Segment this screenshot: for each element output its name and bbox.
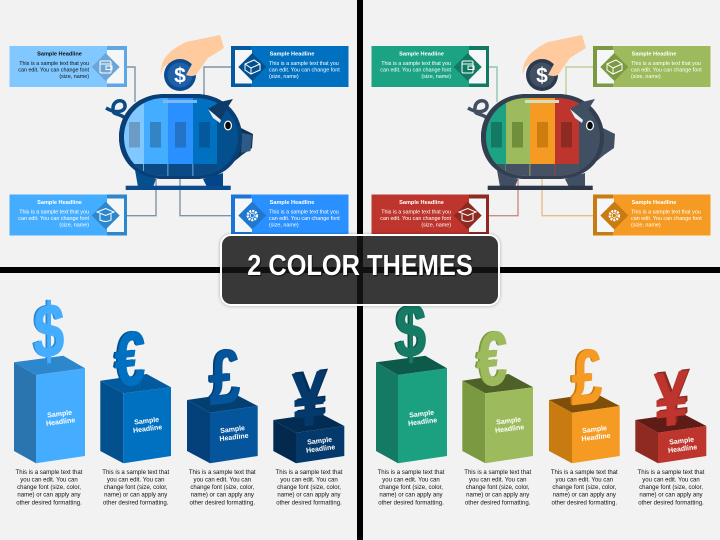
captions: you can edit. You can xyxy=(469,478,526,484)
box: pound column xyxy=(549,393,620,463)
icon: lime euro: € xyxy=(477,315,507,404)
card: bottom left: (size, name) xyxy=(59,222,89,228)
box: euro column: Headline xyxy=(133,424,163,435)
card: bottom left: can edit. You can change font xyxy=(380,216,451,222)
icon: blue euro: € xyxy=(115,315,145,404)
box: euro column: Headline xyxy=(495,424,525,435)
card: top right: This is a sample text that you xyxy=(631,61,701,67)
box: yen column: Headline xyxy=(668,444,698,455)
card: bottom left: This is a sample text that you xyxy=(19,209,89,215)
captions: change font (size, color, xyxy=(104,485,168,491)
card: bottom right: Sample Headline xyxy=(632,200,676,206)
captions: This is a sample text that xyxy=(102,470,169,476)
box: yen column xyxy=(635,413,706,463)
icon: piggy bank xyxy=(468,94,615,190)
captions: change font (size, color, xyxy=(639,485,703,491)
box: dollar column: Sample xyxy=(409,410,435,420)
box: euro column: Sample xyxy=(496,417,522,427)
panel: multicolor currency boxes xyxy=(376,356,706,506)
box: dollar column xyxy=(14,356,85,463)
card: top left xyxy=(10,46,127,87)
icon: orange pound: £ xyxy=(572,333,602,422)
box: pound column: Sample xyxy=(582,425,608,435)
card: top left: Sample Headline xyxy=(399,52,444,58)
card: top left: can edit. You can change font xyxy=(380,67,451,73)
icon: blue dollar: $ xyxy=(34,287,64,376)
captions: you can edit. You can xyxy=(642,478,700,484)
captions: name) or can apply any xyxy=(17,493,82,499)
card: top left: This is a sample text that you xyxy=(381,61,451,67)
captions: change font (size, color, xyxy=(190,485,255,491)
icon: hand dropping coin: $ xyxy=(174,64,186,88)
card: top left xyxy=(372,46,489,87)
captions: This is a sample text that xyxy=(16,470,83,476)
box: dollar column: Headline xyxy=(408,417,438,428)
box: dollar column xyxy=(376,356,447,463)
captions: other desired formatting. xyxy=(638,500,704,506)
captions: This is a sample text that xyxy=(551,470,618,476)
box: dollar column: Sample xyxy=(47,410,73,420)
card: bottom right: Sample Headline xyxy=(270,200,314,206)
captions: you can edit. You can xyxy=(382,478,440,484)
captions: other desired formatting. xyxy=(16,500,82,506)
box: yen column: Sample xyxy=(669,437,695,447)
card: top right: This is a sample text that you xyxy=(269,61,339,67)
card: bottom right: This is a sample text that you xyxy=(631,209,701,215)
captions: name) or can apply any xyxy=(277,493,342,499)
captions: name) or can apply any xyxy=(191,493,255,499)
captions: name) or can apply any xyxy=(553,493,617,499)
panel: multicolor piggy bank infographic xyxy=(372,35,710,236)
captions: you can edit. You can xyxy=(556,478,613,484)
box: euro column xyxy=(100,374,171,463)
box: dollar column: Headline xyxy=(46,417,76,428)
card: top right: Sample Headline xyxy=(270,52,314,58)
title banner: 2 COLOR THEMES xyxy=(247,250,473,282)
captions: This is a sample text that xyxy=(638,470,705,476)
panel: blue currency boxes xyxy=(14,356,344,506)
card: top right: can edit. You can change font xyxy=(269,67,340,73)
captions: other desired formatting. xyxy=(276,500,342,506)
captions: This is a sample text that xyxy=(276,470,343,476)
card: bottom right: (size, name) xyxy=(631,222,661,228)
card: top right xyxy=(231,46,348,87)
card: bottom right: (size, name) xyxy=(269,222,299,228)
box: pound column: Sample xyxy=(220,425,246,435)
box: yen column: Sample xyxy=(307,437,333,447)
card: bottom left xyxy=(10,194,127,236)
card: bottom right: can edit. You can change font xyxy=(631,216,702,222)
card: bottom right: This is a sample text that you xyxy=(269,209,339,215)
card: bottom left: Sample Headline xyxy=(37,200,82,206)
card: bottom left: (size, name) xyxy=(421,222,451,228)
captions: This is a sample text that xyxy=(378,470,445,476)
captions: name) or can apply any xyxy=(104,493,168,499)
captions: other desired formatting. xyxy=(552,500,617,506)
box: euro column: Sample xyxy=(134,417,160,427)
card: top left: Sample Headline xyxy=(37,52,82,58)
captions: you can edit. You can xyxy=(107,478,164,484)
panel: blue piggy bank infographic xyxy=(10,35,348,236)
card: top right xyxy=(593,46,710,87)
icon: hand dropping coin xyxy=(160,35,224,91)
captions: change font (size, color, xyxy=(277,485,341,491)
card: top right: (size, name) xyxy=(269,74,299,80)
title banner xyxy=(220,234,500,306)
box: pound column xyxy=(187,393,258,463)
captions: name) or can apply any xyxy=(466,493,530,499)
icon: hand dropping coin xyxy=(522,35,586,91)
card: top left: This is a sample text that you xyxy=(19,61,89,67)
icon: red yen: ¥ xyxy=(654,355,688,444)
captions: name) or can apply any xyxy=(639,493,704,499)
icon: hand dropping coin: $ xyxy=(536,64,548,88)
card: bottom left: can edit. You can change font xyxy=(18,216,89,222)
card: bottom right xyxy=(593,194,710,236)
captions: you can edit. You can xyxy=(194,478,251,484)
captions: change font (size, color, xyxy=(17,485,81,491)
card: top right: can edit. You can change font xyxy=(631,67,702,73)
card: bottom left: Sample Headline xyxy=(399,200,444,206)
card: top right: (size, name) xyxy=(631,74,661,80)
card: bottom right xyxy=(231,194,348,236)
captions: other desired formatting. xyxy=(378,500,444,506)
card: bottom right: can edit. You can change font xyxy=(269,216,340,222)
captions: other desired formatting. xyxy=(103,500,169,506)
captions: you can edit. You can xyxy=(20,478,78,484)
box: euro column xyxy=(462,374,533,463)
captions: other desired formatting. xyxy=(465,500,531,506)
box: pound column: Headline xyxy=(219,433,249,443)
box: pound column: Headline xyxy=(581,433,611,443)
connector lines xyxy=(127,67,231,216)
captions: This is a sample text that xyxy=(189,470,256,476)
card: top left: (size, name) xyxy=(59,74,89,80)
captions xyxy=(378,470,705,506)
captions: change font (size, color, xyxy=(466,485,530,491)
connector lines xyxy=(489,67,593,216)
icon: piggy bank xyxy=(106,94,253,190)
captions: This is a sample text that xyxy=(464,470,531,476)
captions: name) or can apply any xyxy=(379,493,444,499)
captions: you can edit. You can xyxy=(280,478,338,484)
icon: green dollar: $ xyxy=(396,287,426,376)
card: bottom left xyxy=(372,194,489,236)
icon: blue pound: £ xyxy=(210,333,240,422)
captions: change font (size, color, xyxy=(379,485,443,491)
card: top left: (size, name) xyxy=(421,74,451,80)
card: top left: can edit. You can change font xyxy=(18,67,89,73)
card: bottom left: This is a sample text that you xyxy=(381,209,451,215)
icon: blue yen: ¥ xyxy=(292,355,326,444)
captions: change font (size, color, xyxy=(552,485,617,491)
captions xyxy=(16,470,343,506)
captions: other desired formatting. xyxy=(190,500,255,506)
box: yen column: Headline xyxy=(306,444,336,455)
card: top right: Sample Headline xyxy=(632,52,676,58)
box: yen column xyxy=(273,413,344,463)
